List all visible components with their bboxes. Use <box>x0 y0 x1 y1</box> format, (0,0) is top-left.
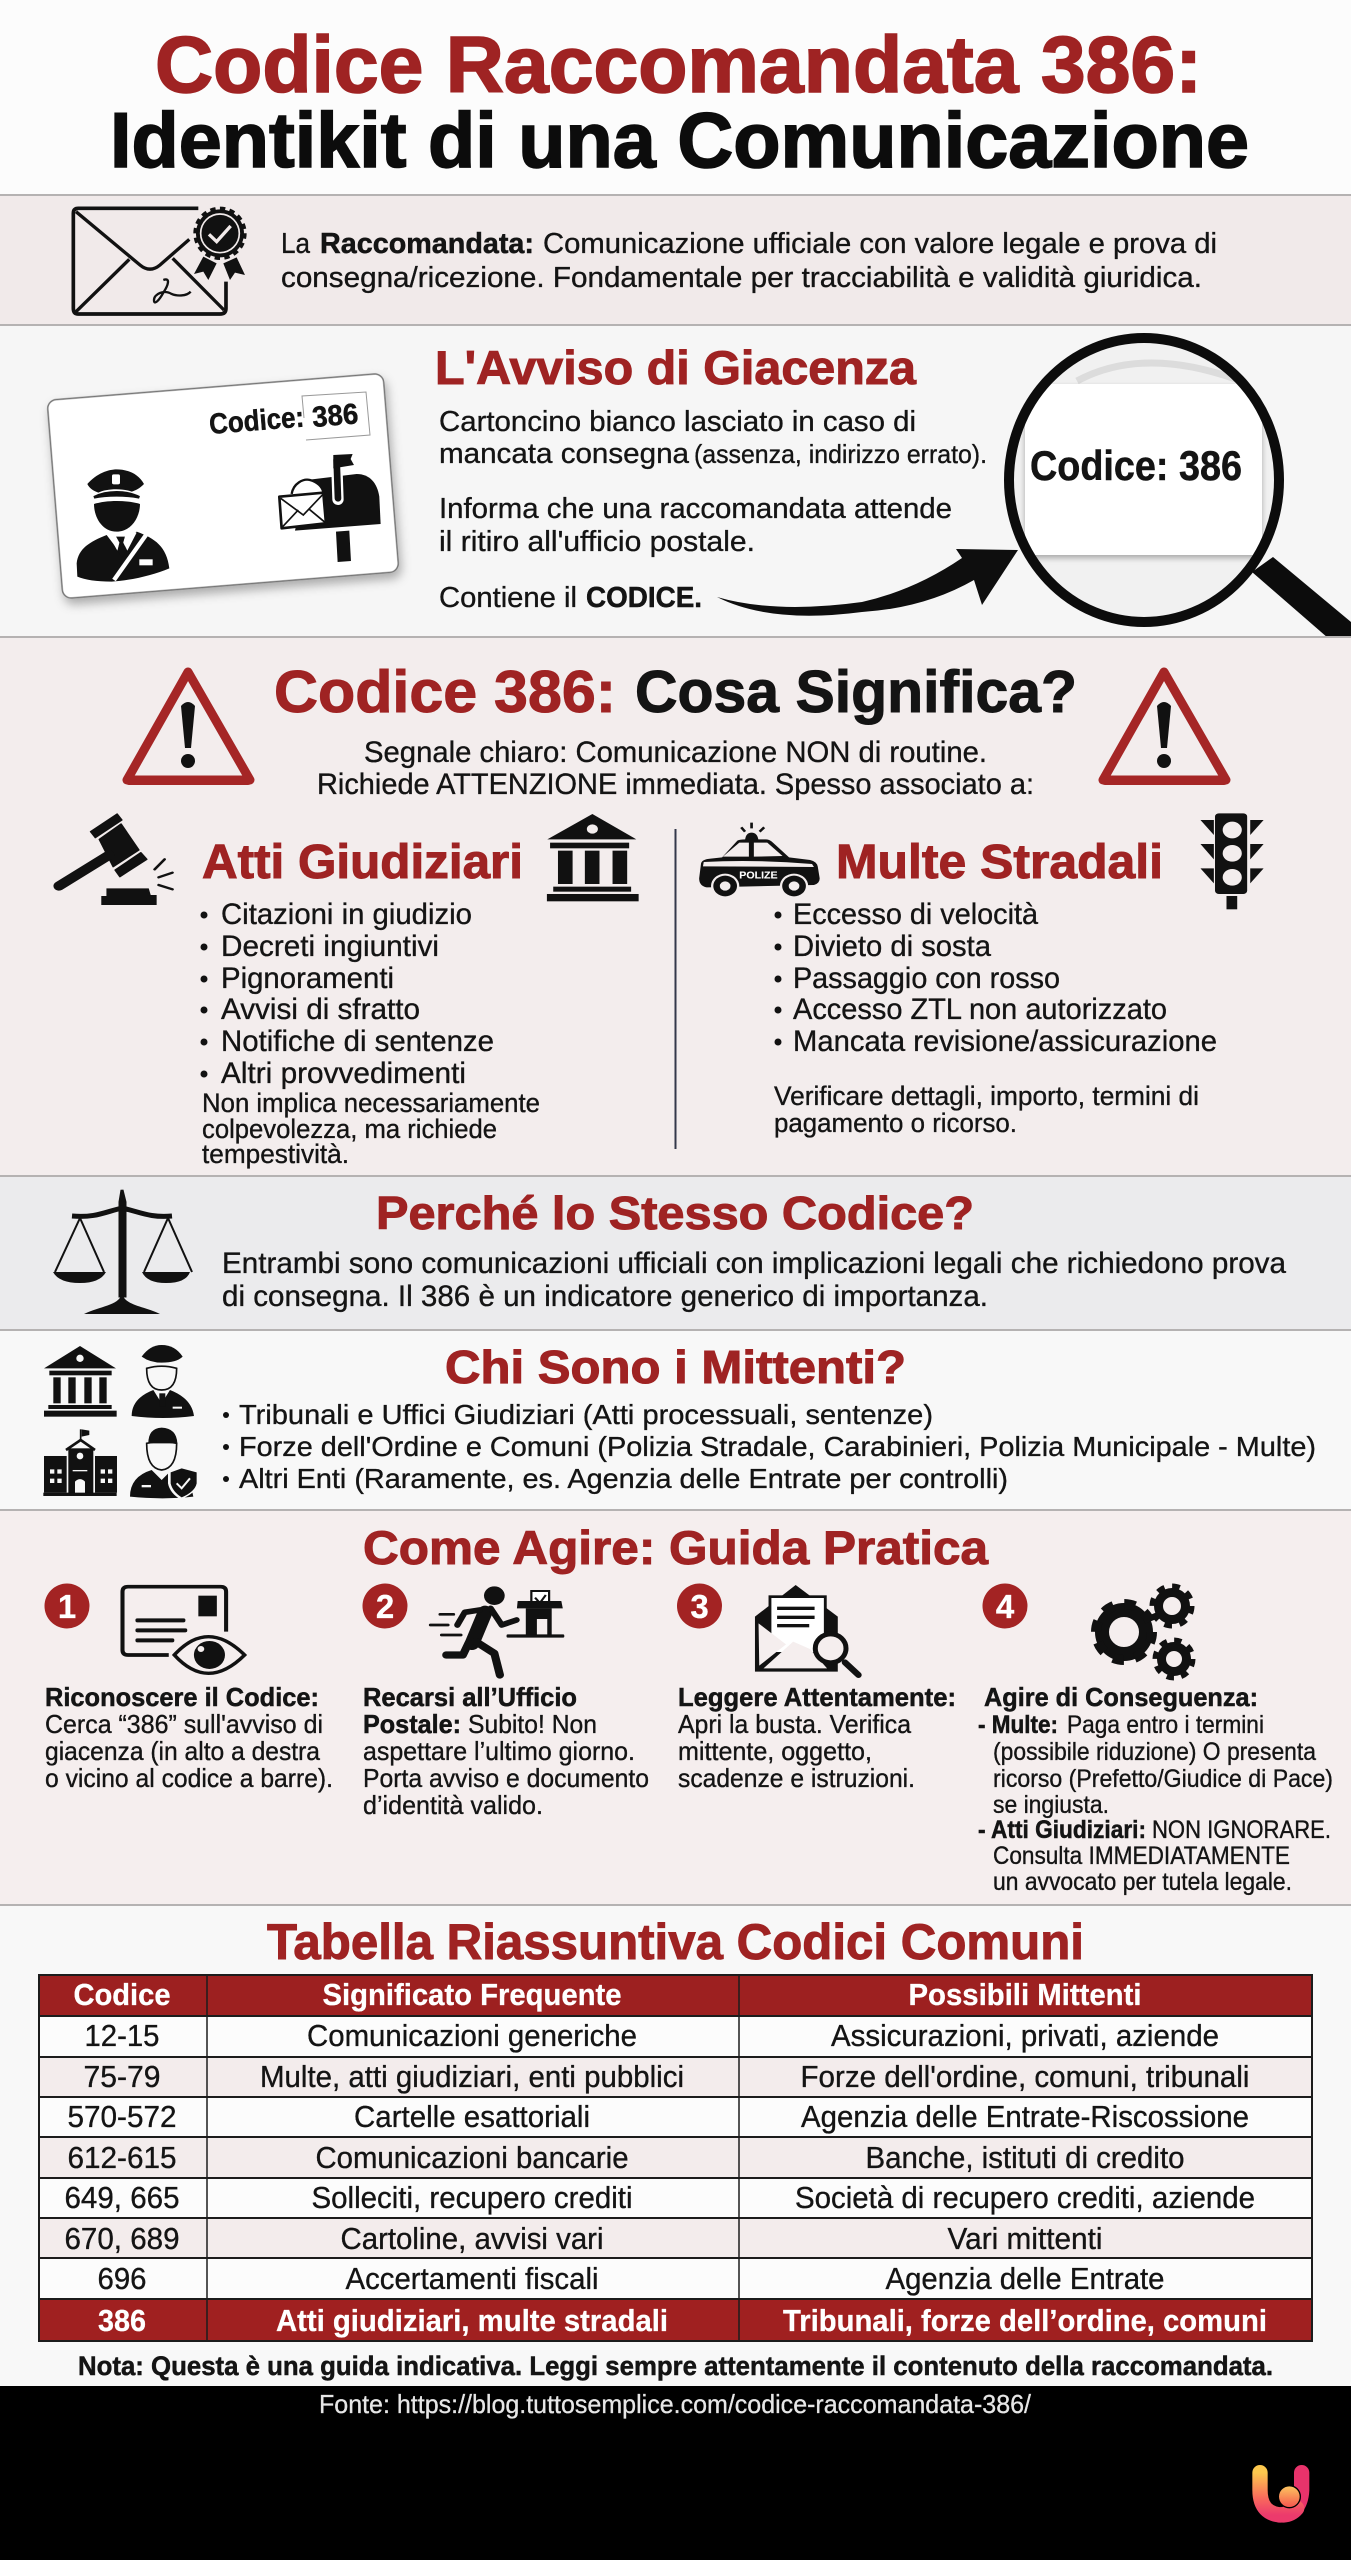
panel: perché lo stesso codice <box>0 1175 1351 1330</box>
intro text: Raccomandata: <box>320 228 534 260</box>
step 4 text: NON IGNORARE. <box>1152 1816 1331 1844</box>
row 612-615: 612-615 <box>68 2140 176 2175</box>
row 12-15 <box>84 2018 1219 2053</box>
step 4 text: (possibile riduzione) O presenta <box>993 1738 1316 1766</box>
list: senders: Tribunali e Uffici Giudiziari (Atti processuali, sentenze) <box>239 1399 933 1430</box>
badge: step 4: 4 <box>996 1588 1015 1625</box>
note: atti giudiziari: tempestività. <box>202 1139 349 1169</box>
heading: chi sono i mittenti: Chi Sono i Mittenti? <box>445 1341 906 1393</box>
list: atti giudiziari: Notifiche di sentenze <box>221 1025 494 1058</box>
step 2 text: aspettare l’ultimo giorno. <box>363 1736 635 1766</box>
list: senders: Altri Enti (Raramente, es. Agenzia delle Entrate per controlli) <box>239 1463 1008 1494</box>
panel: la raccomandata <box>0 194 1351 325</box>
row 670, 689 <box>64 2221 1102 2256</box>
row 75-79: 75-79 <box>84 2059 160 2094</box>
step 1 text <box>45 1682 333 1793</box>
heading: codice 386 cosa significa: Cosa Significa? <box>635 659 1077 725</box>
text block: avviso description: Contiene il <box>439 582 577 614</box>
badge: step 1: 1 <box>58 1588 76 1625</box>
row 75-79 <box>84 2059 1250 2094</box>
table header: Codice <box>74 1977 170 2012</box>
list: multe stradali: Passaggio con rosso <box>793 962 1060 995</box>
badge: step 1 <box>44 1584 90 1628</box>
step 1 text: giacenza (in alto a destra <box>45 1736 321 1766</box>
list: atti giudiziari: Pignoramenti <box>221 962 394 995</box>
row 12-15: Assicurazioni, privati, aziende <box>831 2018 1219 2053</box>
heading: codice 386 cosa significa <box>274 659 1077 725</box>
icon: police car <box>699 823 820 898</box>
text block: explanation <box>222 1247 1286 1313</box>
text block: avviso description: Informa che una raccomandata attende <box>439 493 952 525</box>
step 2 text: Postale: <box>363 1709 461 1739</box>
heading: multe stradali: Multe Stradali <box>836 836 1163 889</box>
icon: warning triangle left <box>125 672 252 785</box>
panel: mittenti <box>0 1329 1351 1509</box>
table: codes <box>39 1975 1312 2341</box>
step 4 text: Paga entro i termini <box>1067 1711 1264 1739</box>
row 670, 689: 670, 689 <box>64 2221 180 2256</box>
step 2 text: Subito! Non <box>468 1709 597 1739</box>
heading: tabella: Tabella Riassuntiva Codici Comuni <box>267 1914 1084 1970</box>
text block: avviso description: mancata consegna <box>439 438 690 470</box>
heading: codice 386 cosa significa: Codice 386: <box>274 659 616 725</box>
source footer: Fonte: https://blog.tuttosemplice.com/codice-raccomandata-386/ <box>319 2389 1032 2419</box>
row 649, 665: Società di recupero crediti, aziende <box>795 2180 1255 2215</box>
step 4 text: - Atti Giudiziari: <box>978 1816 1146 1844</box>
panel: avviso di giacenza <box>0 324 1351 638</box>
icon: sealed envelope <box>73 208 245 314</box>
panel: cosa significa <box>0 636 1351 1175</box>
row 612-615 <box>68 2140 1184 2175</box>
step 2 text: Porta avviso e documento <box>363 1763 649 1793</box>
row 570-572: 570-572 <box>68 2099 176 2134</box>
list: multe stradali <box>774 898 1217 1058</box>
row 612-615: Comunicazioni bancarie <box>316 2140 628 2175</box>
text block: explanation: di consegna. Il 386 è un indicatore generico di importanza. <box>222 1280 988 1313</box>
text block: warning description: Segnale chiaro: Comunicazione NON di routine. <box>364 736 987 769</box>
row 696 <box>98 2261 1164 2296</box>
note: multe stradali: pagamento o ricorso. <box>774 1108 1017 1138</box>
list: atti giudiziari <box>200 898 494 1090</box>
icon: traffic light <box>1200 813 1264 909</box>
row 75-79: Multe, atti giudiziari, enti pubblici <box>260 2059 684 2094</box>
list: atti giudiziari: Avvisi di sfratto <box>221 993 420 1026</box>
heading: perché lo stesso codice: Perché lo Stesso Codice? <box>376 1187 974 1239</box>
panel: come agire <box>0 1509 1351 1905</box>
card code text <box>208 392 370 441</box>
step 2 text: Recarsi all’Ufficio <box>363 1682 577 1712</box>
list: senders: Forze dell'Ordine e Comuni (Polizia Stradale, Carabinieri, Polizia Municipale - Multe) <box>239 1431 1316 1462</box>
icon: postman <box>77 469 169 582</box>
icon group: senders <box>43 1345 198 1499</box>
step 4 text: Agire di Conseguenza: <box>984 1682 1258 1712</box>
table header <box>74 1977 1142 2012</box>
list: atti giudiziari: Citazioni in giudizio <box>221 898 472 931</box>
step 3 text: scadenze e istruzioni. <box>678 1763 915 1793</box>
badge: step 2: 2 <box>376 1588 394 1625</box>
text block: avviso description: (assenza, indirizzo errato). <box>694 439 987 469</box>
card code text: Codice: <box>208 401 305 441</box>
icon: mailbox with envelope <box>279 454 381 562</box>
row 570-572: Agenzia delle Entrate-Riscossione <box>801 2099 1249 2134</box>
row 649, 665 <box>64 2180 1255 2215</box>
step 2 text <box>363 1682 649 1820</box>
list: multe stradali: Mancata revisione/assicurazione <box>793 1025 1217 1058</box>
icon: magnifying glass with code <box>1000 330 1351 638</box>
badge: step 4 <box>982 1584 1028 1628</box>
row 570-572: Cartelle esattoriali <box>354 2099 590 2134</box>
row 12-15: Comunicazioni generiche <box>307 2018 637 2053</box>
note: Nota: Questa è una guida indicativa. Leggi sempre attentamente il contenuto della raccomandata. <box>78 2351 1273 2381</box>
list: senders <box>223 1399 1316 1494</box>
row 612-615: Banche, istituti di credito <box>866 2140 1184 2175</box>
icon: officer <box>132 1345 194 1418</box>
text block: avviso description <box>439 406 987 614</box>
row 75-79: Forze dell'ordine, comuni, tribunali <box>800 2059 1250 2094</box>
step 4 text: Consulta IMMEDIATAMENTE <box>993 1842 1290 1870</box>
list: multe stradali: Accesso ZTL non autorizzato <box>793 993 1167 1026</box>
row 696: Accertamenti fiscali <box>346 2261 598 2296</box>
row 386 highlighted <box>98 2303 1267 2338</box>
badge: step 3 <box>677 1584 722 1628</box>
note: atti giudiziari: Non implica necessariamente <box>202 1088 540 1118</box>
intro text: consegna/ricezione. Fondamentale per tracciabilità e validità giuridica. <box>281 262 1202 294</box>
icon: open envelope with magnifier <box>755 1585 858 1675</box>
intro text <box>281 228 1217 294</box>
panel: title <box>0 0 1351 195</box>
text block: avviso description: CODICE. <box>586 582 702 614</box>
icon: gears <box>1096 1587 1192 1677</box>
step 4 text: un avvocato per tutela legale. <box>993 1868 1292 1896</box>
icon: gavel <box>59 814 172 905</box>
icon: warning triangle right <box>1101 672 1228 785</box>
step 4 text: - Multe: <box>978 1711 1058 1739</box>
table header: Significato Frequente <box>322 1977 622 2012</box>
heading: come agire: Come Agire: Guida Pratica <box>363 1521 989 1574</box>
row 386 highlighted: Atti giudiziari, multe stradali <box>276 2303 668 2338</box>
icon: courthouse <box>44 1346 117 1417</box>
table header: Possibili Mittenti <box>908 1977 1142 2012</box>
row 570-572 <box>68 2099 1249 2134</box>
step 1 text: Riconoscere il Codice: <box>45 1682 319 1712</box>
badge: step 3: 3 <box>690 1588 709 1625</box>
row 696: Agenzia delle Entrate <box>886 2261 1164 2296</box>
step 3 text: Leggere Attentamente: <box>678 1682 956 1712</box>
text block: avviso description: il ritiro all'ufficio postale. <box>439 526 755 558</box>
step 4 text: se ingiusta. <box>993 1791 1109 1819</box>
note: atti giudiziari: colpevolezza, ma richiede <box>202 1114 497 1144</box>
step 4 text: ricorso (Prefetto/Giudice di Pace) <box>993 1765 1333 1793</box>
row 649, 665: Solleciti, recupero crediti <box>312 2180 632 2215</box>
icon: scales <box>53 1190 192 1314</box>
card code text: 386 <box>311 398 359 434</box>
note: multe stradali <box>774 1081 1199 1138</box>
row 386 highlighted: Tribunali, forze dell’ordine, comuni <box>783 2303 1267 2338</box>
note: atti giudiziari <box>202 1088 540 1169</box>
note: multe stradali: Verificare dettagli, importo, termini di <box>774 1081 1199 1111</box>
row 670, 689: Cartoline, avvisi vari <box>340 2221 604 2256</box>
row 696: 696 <box>98 2261 146 2296</box>
icon: card with eye <box>122 1587 245 1673</box>
title line 2: Identikit di una Comunicazione <box>110 96 1249 184</box>
icon: running to post office <box>430 1586 564 1675</box>
panel: tabella riassuntiva <box>0 1904 1351 2386</box>
step 3 text: Apri la busta. Verifica <box>678 1709 912 1739</box>
row 649, 665: 649, 665 <box>64 2180 180 2215</box>
icon: town hall <box>43 1429 117 1496</box>
title line 1: Codice Raccomandata 386: <box>155 20 1202 109</box>
icon: officer with shield <box>130 1428 198 1499</box>
text block: avviso description: Cartoncino bianco lasciato in caso di <box>439 406 916 438</box>
step 2 text: d’identità valido. <box>363 1790 543 1820</box>
step 3 text: mittente, oggetto, <box>678 1736 872 1766</box>
text block: warning description <box>317 736 1034 801</box>
text block: warning description: Richiede ATTENZIONE immediata. Spesso associato a: <box>317 768 1034 801</box>
icon: magnifying glass with code: Codice: 386 <box>1030 442 1242 489</box>
heading: atti giudiziari: Atti Giudiziari <box>202 836 523 889</box>
list: atti giudiziari: Decreti ingiuntivi <box>221 930 439 963</box>
row 386 highlighted: 386 <box>98 2303 146 2338</box>
intro text: La <box>281 228 311 260</box>
list: multe stradali: Divieto di sosta <box>793 930 991 963</box>
list: atti giudiziari: Altri provvedimenti <box>221 1057 466 1090</box>
text block: explanation: Entrambi sono comunicazioni ufficiali con implicazioni legali che richiedono prova <box>222 1247 1286 1280</box>
icon: police car: POLIZE <box>739 870 778 881</box>
step 3 text <box>678 1682 956 1793</box>
heading: avviso di giacenza: L'Avviso di Giacenza <box>435 341 917 394</box>
badge: step 2 <box>362 1584 408 1628</box>
intro text: Comunicazione ufficiale con valore legale e prova di <box>543 228 1217 260</box>
row 12-15: 12-15 <box>84 2018 160 2053</box>
step 1 text: Cerca “386” sull'avviso di <box>45 1709 323 1739</box>
step 1 text: o vicino al codice a barre). <box>45 1763 333 1793</box>
list: multe stradali: Eccesso di velocità <box>793 898 1038 931</box>
icon: courthouse <box>547 814 639 901</box>
icon: logo <box>1260 2473 1302 2515</box>
arrow: to magnifier <box>717 549 1018 616</box>
card: notice with code <box>47 373 399 599</box>
step 4 text <box>978 1682 1333 1896</box>
row 670, 689: Vari mittenti <box>948 2221 1102 2256</box>
